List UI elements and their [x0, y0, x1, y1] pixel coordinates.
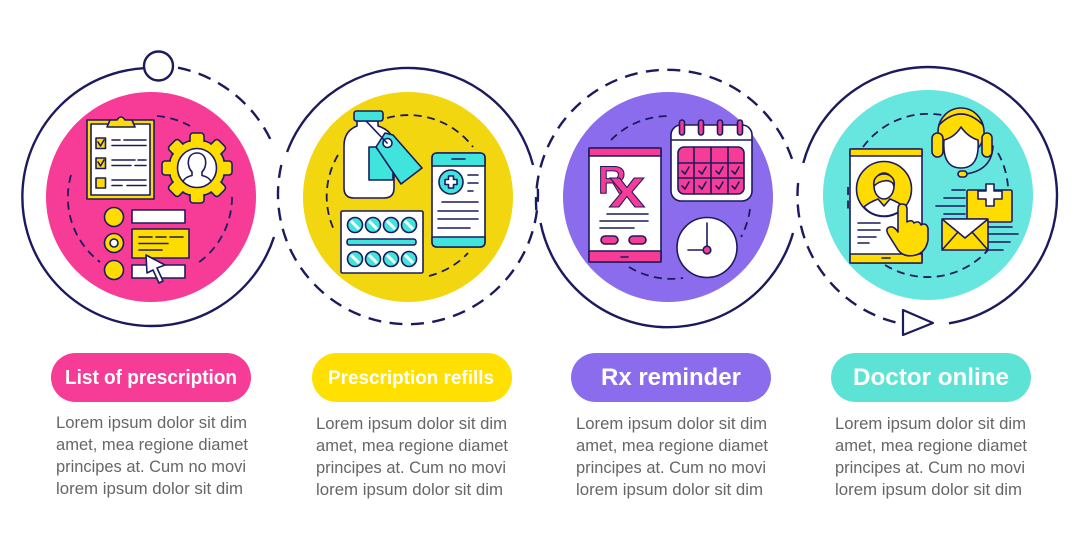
ring 1: [22, 68, 274, 326]
icon: blister pack: [341, 211, 423, 273]
yellow disc: [303, 92, 513, 302]
inner dashed arc 2: [327, 115, 473, 276]
pink disc: [46, 92, 256, 302]
text block 1: [56, 413, 248, 498]
heading pill 2: [312, 353, 512, 402]
heading pill 4: [831, 353, 1031, 402]
icon: medicine bottle with tag: [344, 111, 422, 198]
icon: pointing hand: [887, 204, 928, 256]
teal disc: [823, 90, 1033, 300]
text block 3: lorem ipsum dolor sit dim: [576, 480, 763, 499]
text block 2: principes at. Cum no movi: [316, 458, 506, 477]
panel: rx reminder: [536, 70, 793, 499]
heading pill 3: Rx reminder: [601, 364, 741, 391]
panel: prescription refills: [278, 68, 538, 499]
heading pill 1: List of prescription: [65, 367, 237, 389]
end arrow triangle: [903, 310, 933, 335]
icon: gear with user: [162, 133, 232, 203]
icon: medical box and envelope: [936, 184, 1018, 250]
text block 1: principes at. Cum no movi: [56, 457, 246, 476]
text block 2: amet, mea regione diamet: [316, 436, 508, 455]
icon: tablet with doctor profile: [850, 149, 922, 263]
text block 2: [316, 414, 508, 499]
text block 1: lorem ipsum dolor sit dim: [56, 479, 243, 498]
icon: phone with Rx: x: [609, 157, 645, 219]
icon: headset agent: [932, 108, 993, 177]
heading pill 2: Prescription refills: [328, 368, 494, 389]
icon: clipboard: [87, 117, 154, 199]
icon: phone with medical record: [432, 153, 485, 247]
heading pill 3: [571, 353, 771, 402]
heading pill 1: [51, 353, 251, 402]
text block 3: [576, 414, 768, 499]
text block 3: amet, mea regione diamet: [576, 436, 768, 455]
ring 3: [536, 70, 793, 327]
inner dashed arc 1: [68, 116, 232, 265]
icon: phone with Rx: R: [598, 159, 626, 202]
text block 4: Lorem ipsum dolor sit dim: [835, 414, 1026, 433]
purple disc: [563, 92, 773, 302]
text block 3: principes at. Cum no movi: [576, 458, 766, 477]
inner dashed arc 4: [848, 114, 1008, 277]
text block 2: Lorem ipsum dolor sit dim: [316, 414, 507, 433]
text block 3: Lorem ipsum dolor sit dim: [576, 414, 767, 433]
heading pill 4: Doctor online: [853, 364, 1009, 391]
text block 4: principes at. Cum no movi: [835, 458, 1025, 477]
icon: phone with Rx: [589, 148, 661, 262]
icon: calendar: [671, 120, 752, 201]
text block 4: [835, 414, 1027, 499]
text block 4: lorem ipsum dolor sit dim: [835, 480, 1022, 499]
icon: option form: [104, 208, 189, 283]
inner dashed arc 3: [611, 116, 750, 279]
text block 2: lorem ipsum dolor sit dim: [316, 480, 503, 499]
start marker circle: [144, 52, 173, 80]
panel: list of prescription: [22, 52, 274, 498]
ring 2: [278, 68, 538, 324]
panel: doctor online: [797, 67, 1057, 499]
text block 1: Lorem ipsum dolor sit dim: [56, 413, 247, 432]
ring 4: [797, 67, 1057, 324]
text block 4: amet, mea regione diamet: [835, 436, 1027, 455]
text block 1: amet, mea regione diamet: [56, 435, 248, 454]
icon: clock: [677, 218, 737, 278]
